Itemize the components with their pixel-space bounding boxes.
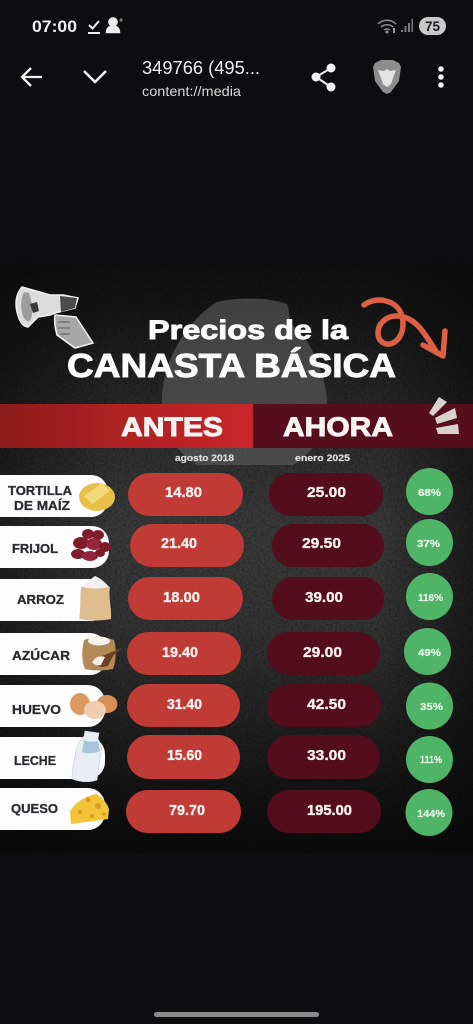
header band: ahora: AHORA — [283, 412, 393, 442]
icon: cell signal — [401, 19, 413, 32]
icon: more menu — [438, 66, 444, 88]
pill: ahora 195.00 — [267, 790, 381, 833]
file url: content://media — [142, 83, 241, 99]
icon: person add — [106, 18, 123, 33]
date: enero 2025: enero 2025 — [295, 453, 351, 464]
icon: download check — [88, 21, 100, 33]
background: dark texture — [0, 263, 473, 853]
pill: ahora 29.00: 29.00 — [303, 645, 342, 661]
battery level: 75 — [425, 19, 440, 34]
row: leche — [0, 731, 453, 783]
badge: 116%: 116% — [418, 592, 444, 604]
header band: antes — [0, 404, 253, 448]
icon: rice sack — [79, 576, 111, 620]
label: frijol — [0, 526, 109, 568]
icon: eggs — [70, 693, 118, 719]
pill: antes 14.80: 14.80 — [165, 485, 202, 501]
pill: antes 14.80 — [128, 473, 243, 516]
pill: ahora 39.00 — [272, 577, 384, 620]
title: CANASTA BÁSICA — [67, 347, 396, 384]
file title: 349766 (495... — [142, 58, 260, 78]
label: azúcar: AZÚCAR — [12, 648, 71, 663]
pill: ahora 33.00: 33.00 — [307, 748, 346, 764]
title — [67, 315, 396, 384]
badge: 68%: 68% — [418, 487, 442, 499]
pill: antes 15.60: 15.60 — [167, 748, 202, 764]
pill: antes 79.70 — [126, 790, 241, 833]
icon: sugar sack with scoop — [82, 636, 123, 670]
row: tortilla de maíz — [0, 468, 453, 517]
label: tortilla de maíz — [0, 475, 108, 517]
pill: ahora 25.00: 25.00 — [307, 485, 346, 501]
label: tortilla de maíz: TORTILLA — [8, 483, 73, 498]
pill: ahora 29.00 — [267, 632, 380, 675]
row: huevo — [0, 682, 453, 730]
icon: speed lines — [429, 397, 459, 434]
row: azúcar — [0, 628, 451, 675]
icon: back arrow — [22, 68, 42, 86]
infographic image — [0, 263, 473, 853]
icon: curly arrow — [364, 300, 445, 356]
background: faded tortilla — [162, 298, 327, 465]
icon: chevron down — [84, 71, 106, 82]
header band: ahora — [253, 404, 473, 448]
pill: ahora 29.50: 29.50 — [302, 536, 341, 552]
pill: antes 19.40 — [127, 632, 241, 675]
label: arroz — [0, 579, 108, 621]
badge: 111%: 111% — [420, 754, 443, 766]
clock: 07:00 — [32, 17, 77, 36]
icon: megaphone with hand — [16, 287, 93, 348]
header band: antes: ANTES — [121, 412, 223, 442]
badge: 111% — [406, 736, 453, 783]
badge: 68% — [406, 468, 453, 515]
pill: antes 18.00 — [128, 577, 243, 620]
badge: 116% — [406, 573, 453, 620]
row: queso — [0, 788, 452, 836]
pill: antes 19.40: 19.40 — [162, 645, 198, 661]
date: agosto 2018: agosto 2018 — [175, 453, 234, 464]
badge: 35% — [406, 682, 453, 730]
label: tortilla de maíz: DE MAÍZ — [14, 498, 70, 513]
pill: antes 31.40 — [127, 684, 240, 727]
badge: 35%: 35% — [420, 701, 444, 713]
pill: antes 21.40: 21.40 — [161, 536, 197, 552]
pill: ahora 29.50 — [272, 524, 384, 567]
badge: 37% — [406, 519, 453, 566]
label: queso — [0, 788, 105, 830]
pill: antes 21.40 — [130, 524, 244, 567]
row: arroz — [0, 573, 453, 621]
home indicator — [154, 1012, 319, 1017]
icon: wifi signal — [378, 20, 396, 33]
pill: ahora 39.00: 39.00 — [305, 590, 343, 606]
browser toolbar — [22, 58, 444, 99]
label: arroz: ARROZ — [17, 592, 64, 607]
pill: antes 79.70: 79.70 — [169, 803, 205, 819]
label: queso: QUESO — [11, 801, 58, 816]
label: leche — [0, 737, 105, 779]
pill: ahora 33.00 — [267, 735, 380, 779]
label: frijol: FRIJOL — [12, 541, 58, 556]
pill: antes 31.40: 31.40 — [167, 697, 202, 713]
icon: share — [312, 64, 334, 90]
row: frijol — [0, 519, 453, 568]
pill: ahora 25.00 — [269, 473, 383, 516]
icon: cheese — [70, 794, 109, 824]
badge: 49% — [404, 628, 451, 675]
icon: beans — [71, 529, 111, 561]
title: Precios de la — [148, 315, 348, 345]
icon: milk bottle — [72, 731, 101, 782]
badge: 49%: 49% — [418, 647, 442, 659]
battery level — [419, 17, 446, 35]
label: azúcar — [0, 633, 107, 675]
label: huevo — [0, 685, 105, 727]
icon: tortilla — [79, 483, 115, 511]
badge: 37%: 37% — [417, 538, 441, 550]
pill: ahora 42.50: 42.50 — [307, 697, 346, 713]
badge: 144% — [406, 789, 452, 836]
pill: ahora 195.00: 195.00 — [307, 803, 352, 819]
badge: 144%: 144% — [417, 808, 446, 820]
pill: antes 15.60 — [127, 735, 240, 779]
pill: ahora 42.50 — [267, 684, 381, 727]
status bar — [32, 17, 446, 36]
pill: antes 18.00: 18.00 — [163, 590, 200, 606]
label: leche: LECHE — [14, 753, 56, 768]
icon: brave lion shield — [373, 60, 401, 94]
label: huevo: HUEVO — [12, 702, 61, 717]
